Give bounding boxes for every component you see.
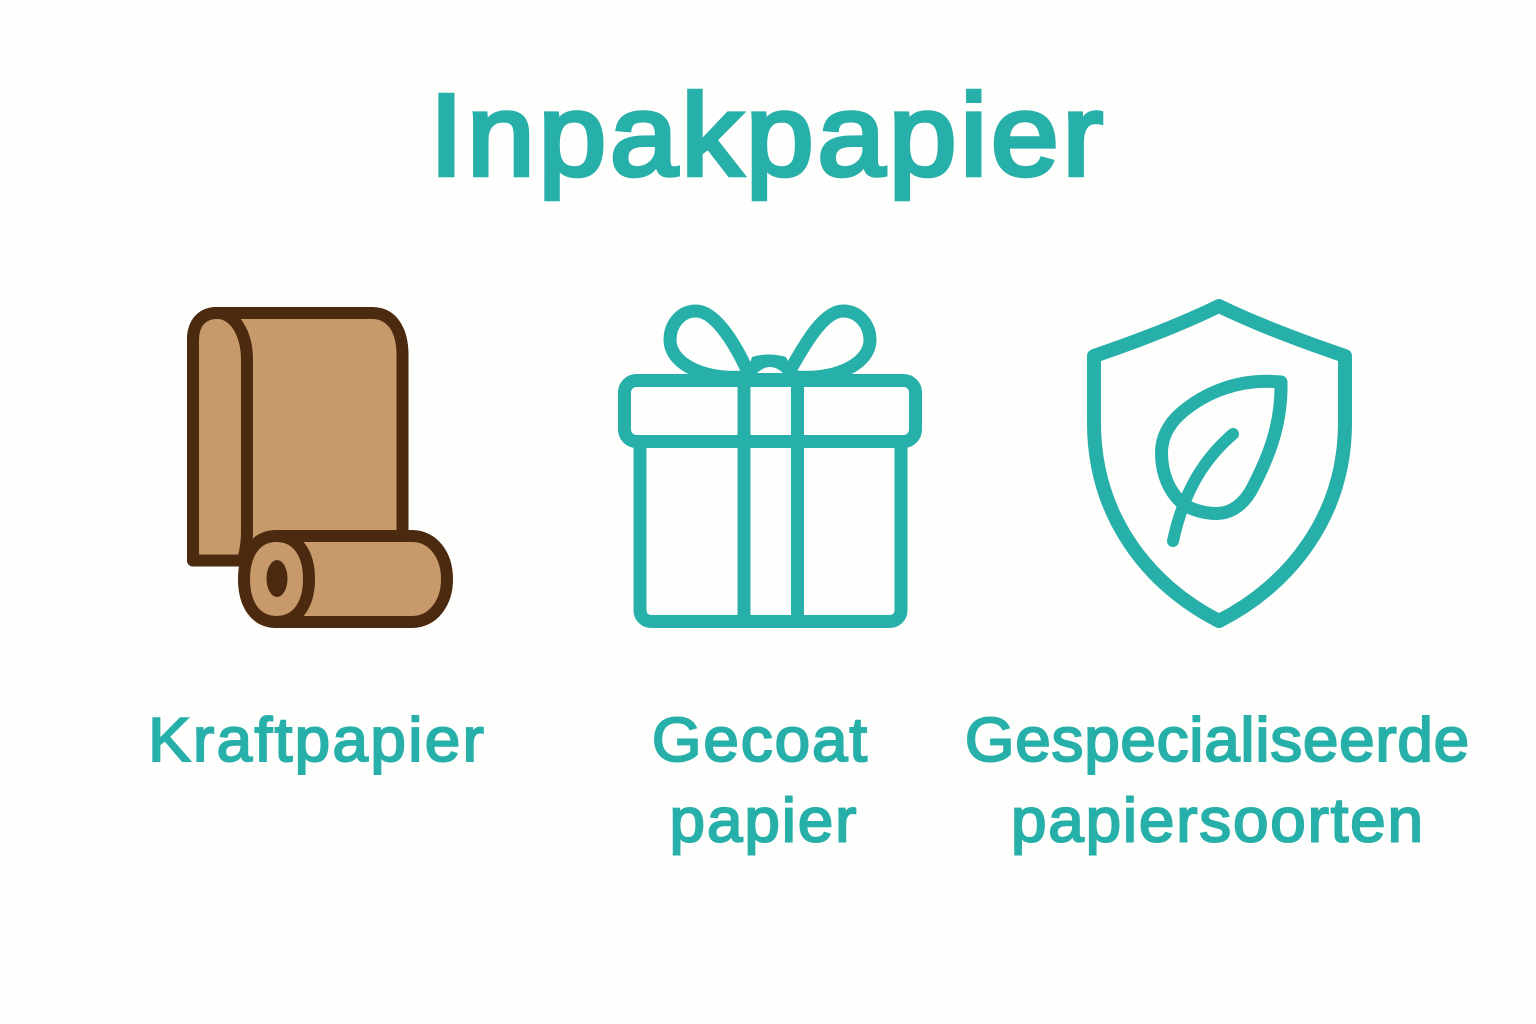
leaf stem	[1173, 434, 1233, 541]
roll end cap	[244, 536, 309, 622]
label: Gecoat papier	[652, 706, 868, 855]
roll core	[266, 560, 288, 597]
leaf outline	[1162, 381, 1281, 514]
icon: kraft paper roll	[193, 313, 447, 622]
folded edge	[193, 313, 247, 560]
main sheet	[193, 313, 402, 560]
title: Inpakpapier	[430, 71, 1103, 200]
lid	[624, 380, 916, 442]
label: Gecoat papier: papier	[670, 786, 856, 855]
shield outline	[1094, 306, 1345, 621]
label: Gecoat papier: Gecoat	[652, 706, 868, 775]
icon: gift box	[624, 311, 916, 622]
box body	[640, 442, 901, 622]
label: Gespecialiseerde papiersoorten	[965, 706, 1469, 855]
right bow loop	[789, 311, 870, 377]
label: Kraftpapier: Kraftpapier	[148, 706, 484, 775]
label: Gespecialiseerde papiersoorten: papiersoorten	[1011, 786, 1423, 855]
bow knot	[746, 354, 795, 376]
left bow loop	[670, 311, 748, 377]
icon: shield with leaf	[1094, 306, 1345, 621]
small roll body	[276, 536, 447, 622]
vertical ribbon	[744, 380, 798, 621]
label: Gespecialiseerde papiersoorten: Gespecialiseerde	[965, 706, 1469, 775]
